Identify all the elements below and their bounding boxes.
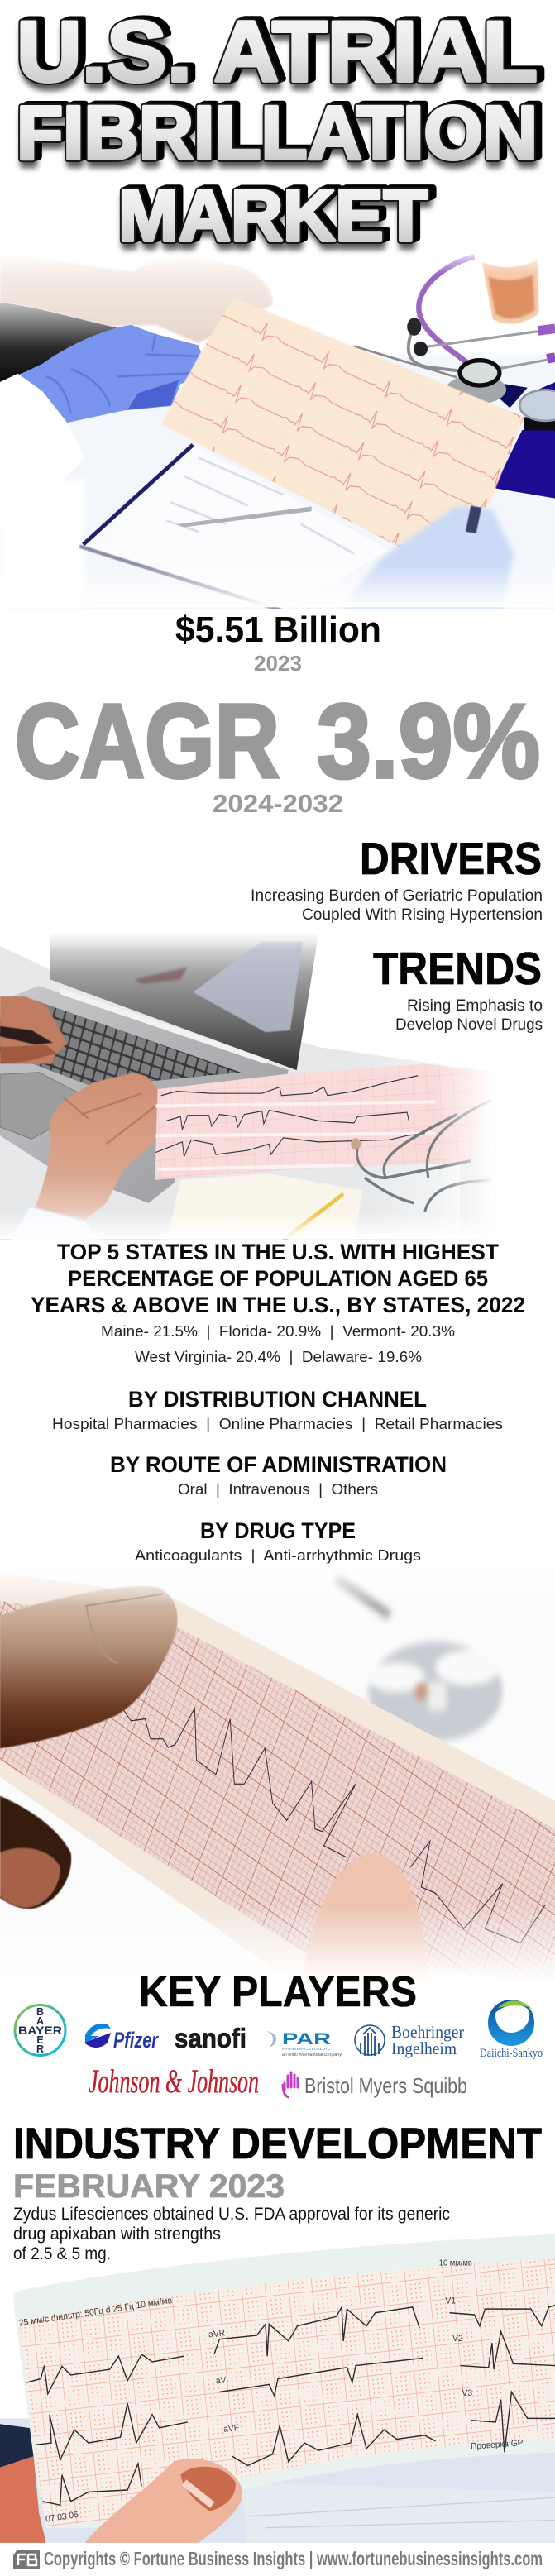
development date: FEBRUARY 2023 — [13, 2168, 285, 2205]
logo: Bayer: B — [36, 2006, 44, 2018]
logo: sanofi: sanofi — [175, 2023, 246, 2053]
blue glove — [20, 325, 207, 423]
printed labels: V2 — [452, 2334, 463, 2344]
laptop deck — [0, 986, 289, 1203]
trends heading: TRENDS — [373, 943, 542, 994]
stack of paper edges — [241, 2483, 555, 2543]
top 5 states heading: PERCENTAGE OF POPULATION AGED 65 — [68, 1266, 488, 1291]
drivers text — [251, 887, 543, 924]
blurred stethoscope — [337, 1578, 503, 1742]
paper sheet — [13, 2234, 555, 2528]
segment: drug type — [135, 1518, 421, 1564]
stethoscope chest piece — [446, 361, 506, 404]
title line: MARKET: MARKET — [118, 174, 428, 256]
logo: Par Pharmaceutical: PHARMACEUTICAL — [282, 2047, 331, 2051]
lower fingers — [0, 1796, 71, 1909]
segment: route of administration — [110, 1452, 447, 1498]
logo: Pfizer: Pfizer — [113, 2028, 159, 2053]
ECG trace — [110, 1708, 545, 1943]
pill bottle — [482, 260, 538, 323]
ECG paper — [161, 297, 524, 547]
footer — [13, 2548, 543, 2569]
title line: MARKET: MARKET — [118, 174, 428, 256]
title line: FIBRILLATION: FIBRILLATION — [17, 91, 538, 175]
stethoscope tubes — [357, 1100, 492, 1212]
photo: fingers holding ECG strip — [0, 1563, 555, 1985]
stethoscope tubes — [354, 256, 555, 377]
blurred second glove — [340, 506, 514, 609]
segment: route of administration: Oral | Intravenous | Others — [178, 1481, 378, 1498]
forecast period: 2024-2032 — [213, 789, 343, 818]
ECG grid area — [20, 2258, 555, 2528]
clipboard — [79, 445, 390, 611]
printed labels: aVL — [215, 2374, 232, 2387]
top 5 states heading: TOP 5 STATES IN THE U.S. WITH HIGHEST — [57, 1240, 499, 1264]
blurred backdrop — [0, 1568, 555, 1985]
printed labels: Проверка:GP — [471, 2438, 524, 2452]
icon: Fortune Business Insights logo — [13, 2550, 40, 2569]
desk fade right — [414, 1061, 460, 1240]
logo: Bayer: A — [36, 2015, 44, 2027]
top 5 states values — [101, 1323, 455, 1365]
pen — [177, 506, 312, 527]
keyboard — [0, 1001, 241, 1085]
bottom fingertip — [301, 1852, 428, 1985]
right fade — [439, 1067, 495, 1240]
logo: Bayer: BAYER — [18, 2024, 62, 2037]
photo: printed ECG held by thumb — [0, 2234, 555, 2543]
printed labels — [18, 2258, 524, 2525]
title — [17, 4, 538, 256]
logo: Daiichi-Sankyo — [480, 2000, 543, 2060]
top 5 states values: Maine- 21.5% | Florida- 20.9% | Vermont- 20.3% — [101, 1323, 455, 1340]
background under paper — [0, 2418, 555, 2543]
logo: Bristol Myers Squibb: Bristol Myers Squibb — [304, 2073, 467, 2098]
white coat sleeve — [0, 374, 84, 478]
trends text — [395, 997, 543, 1034]
logo: Boehringer Ingelheim — [355, 2022, 464, 2058]
blood pressure cuff and gauge — [494, 382, 555, 499]
ECG traces — [26, 2306, 555, 2505]
logo: Par Pharmaceutical — [266, 2031, 342, 2057]
printed labels: V3 — [462, 2388, 472, 2398]
left hand on keys — [0, 996, 67, 1063]
ECG paper strip border — [0, 1573, 555, 1985]
printed labels: aVR — [208, 2328, 226, 2339]
title line: U.S. ATRIAL: U.S. ATRIAL — [17, 4, 538, 100]
printed labels: 10 мм/мв — [439, 2258, 472, 2268]
segment: drug type: Anticoagulants | Anti-arrhythmic Drugs — [135, 1547, 421, 1564]
ECG printout — [155, 1063, 492, 1180]
logo: Bayer — [15, 2005, 65, 2056]
table surface — [66, 356, 554, 609]
thumb and hand — [0, 2456, 242, 2543]
shirt cuff — [11, 1207, 99, 1240]
printed labels: 25 мм/с фильтр: 50Гц d 25 Гц 10 мм/мв — [18, 2296, 173, 2329]
bottom fade — [0, 1212, 476, 1239]
logo: Boehringer Ingelheim: Ingelheim — [391, 2038, 457, 2058]
logo: Johnson & Johnson: Johnson & Johnson — [89, 2062, 259, 2100]
photo: hand holding ECG strip beside stethoscope — [0, 248, 555, 613]
logo: Par Pharmaceutical: PAR — [282, 2031, 331, 2048]
segment: distribution channel — [52, 1387, 503, 1432]
development text: of 2.5 & 5 mg. — [13, 2244, 111, 2263]
printed labels: 07 03 06 — [45, 2510, 79, 2525]
market size value: $5.51 Billion — [175, 609, 381, 650]
top fade — [0, 1563, 555, 1606]
market size year: 2023 — [254, 651, 302, 676]
dark backdrop left — [0, 303, 117, 384]
trends text: Develop Novel Drugs — [395, 1016, 543, 1034]
key players heading: KEY PLAYERS — [139, 1968, 417, 2016]
logo: Par Pharmaceutical: an endo international company — [282, 2053, 342, 2057]
top thumb — [0, 1586, 178, 1748]
desk surface — [0, 946, 495, 1240]
ECG grid — [0, 1601, 555, 1985]
photo: hands typing on laptop with ECG printout — [0, 936, 492, 1240]
title line: FIBRILLATION: FIBRILLATION — [17, 91, 538, 175]
segment: distribution channel: BY DISTRIBUTION CHANNEL — [128, 1387, 427, 1412]
segment: distribution channel: Hospital Pharmacies | Online Pharmacies | Retail Pharmacies — [52, 1416, 503, 1432]
drivers text: Increasing Burden of Geriatric Population — [251, 887, 543, 905]
segment: route of administration: BY ROUTE OF ADMINISTRATION — [110, 1452, 447, 1477]
printed labels: V1 — [445, 2296, 456, 2306]
top 5 states heading: YEARS & ABOVE IN THE U.S., BY STATES, 2022 — [31, 1293, 525, 1317]
development text: Zydus Lifesciences obtained U.S. FDA approval for its generic — [13, 2205, 450, 2224]
logo: Boehringer Ingelheim: Boehringer — [391, 2022, 464, 2042]
top 5 states values: West Virginia- 20.4% | Delaware- 19.6% — [135, 1349, 422, 1365]
logo: Pfizer — [84, 2024, 159, 2053]
printed labels: aVF — [223, 2423, 240, 2435]
right hand and forearm — [36, 1073, 166, 1220]
development text — [13, 2205, 450, 2263]
logo: Bayer: E — [36, 2034, 44, 2046]
trends text: Rising Emphasis to — [407, 997, 543, 1015]
CAGR figure — [15, 682, 540, 800]
drivers text: Coupled With Rising Hypertension — [302, 906, 543, 924]
title line: U.S. ATRIAL: U.S. ATRIAL — [17, 4, 538, 100]
CAGR figure: CAGR — [15, 682, 280, 800]
trackpad — [0, 1073, 79, 1139]
development text: drug apixaban with strengths — [13, 2225, 221, 2244]
laptop screen — [50, 933, 318, 1070]
segment: drug type: BY DRUG TYPE — [200, 1518, 356, 1543]
top fade — [1, 254, 538, 273]
CAGR figure: 3.9% — [317, 682, 540, 800]
bottom fade — [86, 568, 554, 607]
notebook and pencil — [166, 1173, 363, 1240]
bottom fade — [0, 1905, 555, 1981]
top 5 states heading — [31, 1240, 525, 1317]
logo: Bayer: R — [36, 2043, 44, 2055]
arm and hand in background — [0, 255, 273, 343]
top fade — [50, 934, 318, 946]
